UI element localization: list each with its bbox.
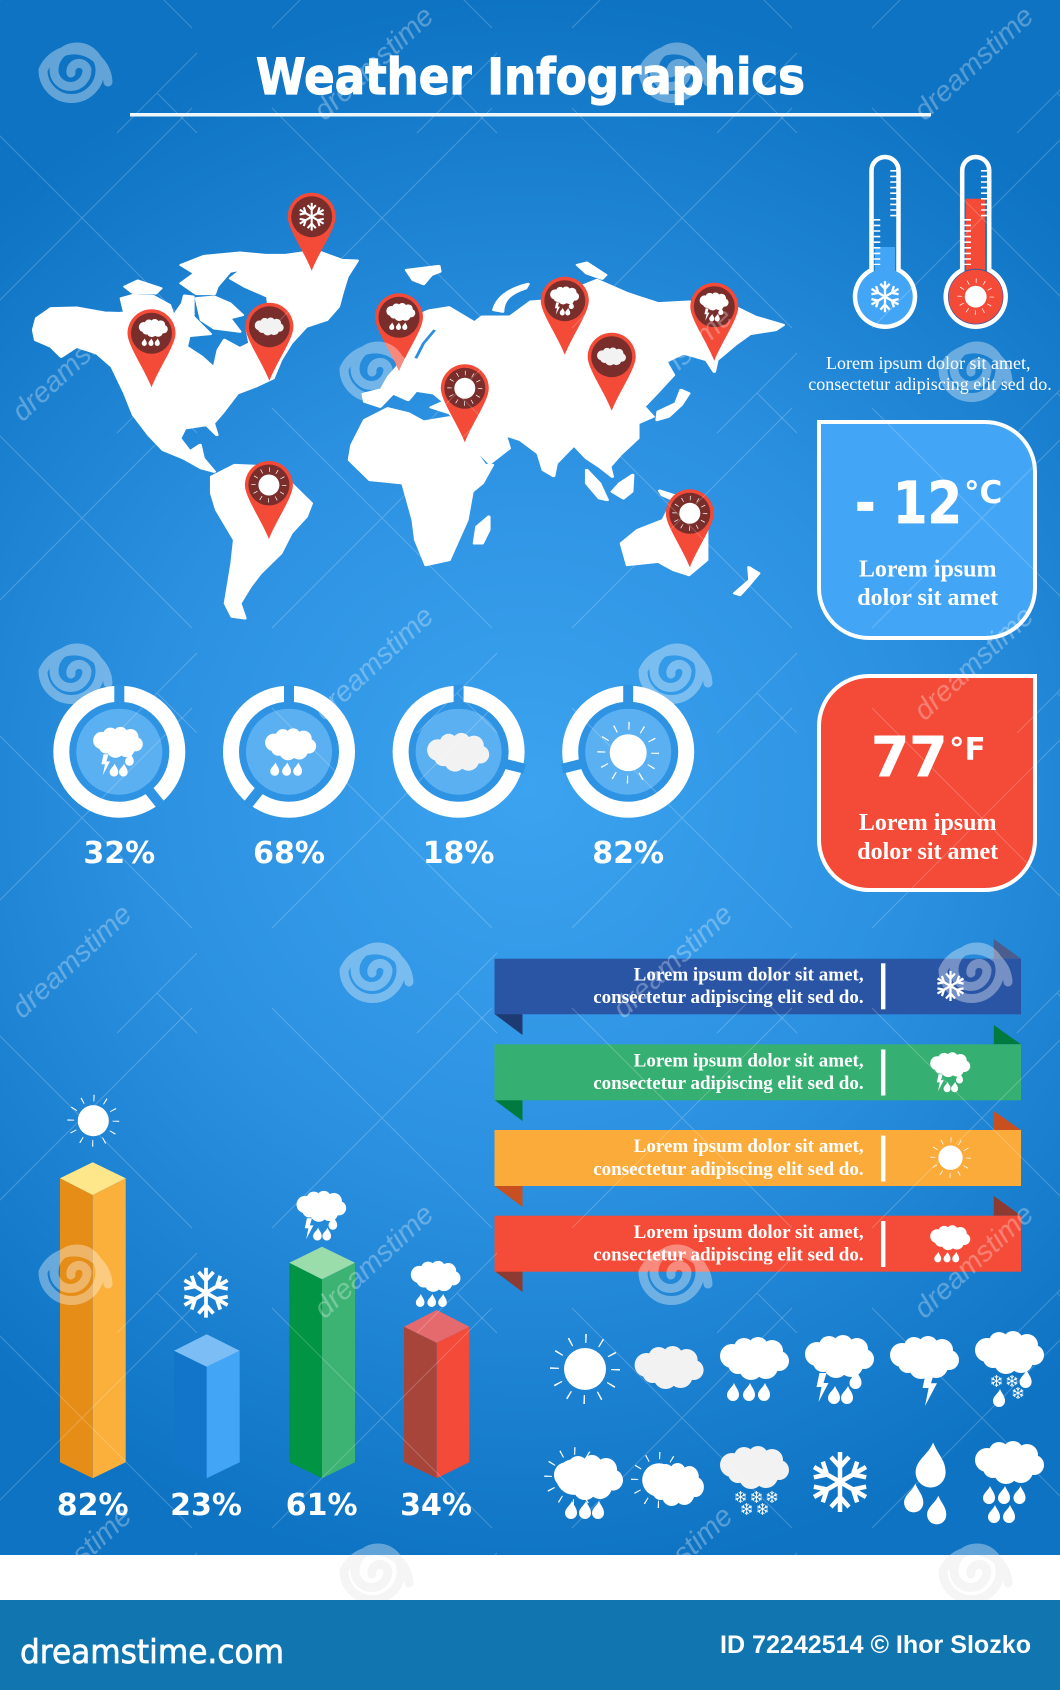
icon: sun xyxy=(554,1338,616,1400)
title underline xyxy=(130,113,931,116)
icon: storm cloud xyxy=(805,1335,874,1404)
footer logo: dreamstime.com xyxy=(20,1632,284,1671)
faint watermark on white band xyxy=(340,1555,1012,1600)
card: 77 fahrenheit: °F xyxy=(949,732,986,768)
bar: orange 82 percent xyxy=(57,1098,129,1523)
watermark overlay: dreamstime xyxy=(6,301,138,428)
card: minus 12 celsius: - 12 xyxy=(855,469,962,537)
ribbon: green storm xyxy=(494,1025,1021,1121)
footer credit: ID 72242514 © Ihor Slozko xyxy=(720,1631,1031,1659)
card: minus 12 celsius: °C xyxy=(964,475,1002,511)
footer bar xyxy=(0,1600,1060,1690)
card: 77 fahrenheit: 77 xyxy=(871,725,948,789)
ring: 32 percent xyxy=(61,685,177,810)
icon: heavy rain cloud xyxy=(975,1441,1044,1523)
watermark overlay: dreamstime xyxy=(308,0,440,127)
bar: green 61 percent: 61% xyxy=(286,1488,358,1523)
ring: 82 percent xyxy=(562,685,686,810)
watermark overlay: dreamstime xyxy=(607,898,739,1025)
ribbon: orange sun xyxy=(494,1111,1021,1207)
pin: cloud Asia xyxy=(588,333,636,411)
card: 77 fahrenheit xyxy=(819,676,1035,890)
white band xyxy=(0,1555,1060,1600)
Eurasia and Africa xyxy=(349,280,783,565)
South America xyxy=(212,465,311,618)
ribbon: blue snow: Lorem ipsum dolor sit amet, xyxy=(634,965,864,986)
watermark overlay: dreamstime xyxy=(6,1500,138,1627)
pin: storm east Russia xyxy=(690,283,738,361)
icon: sun with cloud xyxy=(635,1456,704,1506)
ring percentages: 18% xyxy=(423,836,495,871)
watermark overlay: dreamstime xyxy=(607,301,739,428)
watermark overlay: dreamstime xyxy=(308,600,440,727)
icon: snowflake xyxy=(810,1452,870,1512)
thermometer caption: Lorem ipsum dolor sit amet, xyxy=(826,353,1030,373)
watermark overlay: dreamstime xyxy=(908,0,1040,127)
pin: sun Australia xyxy=(666,489,714,567)
watermark overlay: dreamstime xyxy=(908,1198,1040,1325)
ribbon: blue snow xyxy=(494,939,1021,1035)
card: minus 12 celsius: Lorem ipsum xyxy=(859,556,996,582)
other islands and Australia xyxy=(407,263,759,595)
icon: snow cloud xyxy=(720,1446,789,1515)
thermometer caption: consectetur adipiscing elit sed do. xyxy=(808,374,1052,394)
pin: snow Greenland xyxy=(288,193,336,271)
bar: blue 23 percent xyxy=(170,1268,242,1523)
card: 77 fahrenheit: dolor sit amet xyxy=(857,839,998,865)
ring: 68 percent xyxy=(231,685,347,810)
ring percentages xyxy=(83,836,664,871)
pin: cloud Canada xyxy=(245,303,293,381)
world map xyxy=(34,251,783,618)
Baltic sea xyxy=(416,330,435,358)
ribbon: green storm: Lorem ipsum dolor sit amet, xyxy=(634,1050,864,1072)
pin: rain North America xyxy=(128,309,176,387)
ribbon: red rain xyxy=(494,1196,1021,1292)
thermometer: cold xyxy=(855,157,915,327)
icon: lightning cloud xyxy=(890,1336,959,1406)
Arctic islands xyxy=(125,281,242,332)
icon set xyxy=(548,1331,1044,1524)
card: 77 fahrenheit: Lorem ipsum xyxy=(859,810,996,836)
bar: orange 82 percent: 82% xyxy=(57,1488,129,1523)
icon: sun with rain cloud xyxy=(548,1451,623,1519)
ribbon: red rain: consectetur adipiscing elit sed do. xyxy=(593,1244,864,1266)
pin: storm Siberia xyxy=(541,277,589,355)
icon: water drops xyxy=(904,1442,946,1524)
bar: red 34 percent: 34% xyxy=(400,1488,472,1523)
bar: blue 23 percent: 23% xyxy=(170,1488,242,1523)
thermometer: hot xyxy=(946,157,1006,327)
ribbon: green storm: consectetur adipiscing elit sed do. xyxy=(593,1073,864,1094)
North America and Greenland xyxy=(34,251,357,472)
icon: cloud xyxy=(635,1346,704,1389)
watermark overlay: dreamstime xyxy=(308,1198,440,1325)
pin: sun South America xyxy=(245,461,293,539)
pin: rain Europe xyxy=(375,293,423,371)
watermark overlay: dreamstime xyxy=(607,1500,739,1627)
ribbon: red rain: Lorem ipsum dolor sit amet, xyxy=(634,1222,864,1243)
icon: rain cloud xyxy=(720,1337,789,1401)
ribbon: blue snow: consectetur adipiscing elit sed do. xyxy=(593,987,864,1008)
card: minus 12 celsius xyxy=(819,422,1035,638)
ring percentages: 32% xyxy=(83,836,155,871)
bar: red 34 percent xyxy=(400,1261,472,1523)
watermark overlay: dreamstime xyxy=(6,898,138,1025)
ring: 18 percent xyxy=(401,685,525,810)
bar: green 61 percent xyxy=(286,1191,358,1523)
ribbon: orange sun: consectetur adipiscing elit sed do. xyxy=(593,1159,864,1180)
title: Weather Infographics xyxy=(256,48,805,106)
card: minus 12 celsius: dolor sit amet xyxy=(857,585,998,611)
map pins xyxy=(128,193,738,567)
ring percentages: 82% xyxy=(592,836,664,871)
icon: sleet cloud xyxy=(975,1331,1044,1407)
ribbon: orange sun: Lorem ipsum dolor sit amet, xyxy=(634,1136,864,1157)
ring percentages: 68% xyxy=(253,836,325,871)
pin: sun Middle East xyxy=(441,364,489,442)
watermark overlay: dreamstime xyxy=(908,600,1040,727)
